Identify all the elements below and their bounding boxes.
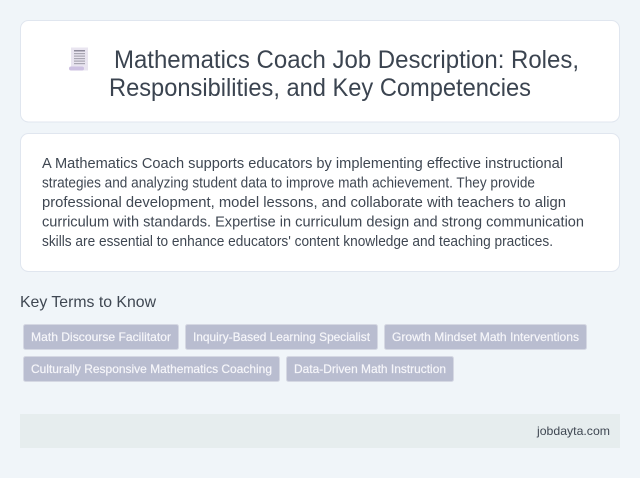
tag: data-driven <box>286 356 454 382</box>
footer source: jobdayta.com <box>536 424 610 438</box>
tag list <box>24 324 586 382</box>
description text <box>42 156 584 250</box>
heading: key terms: Key Terms to Know <box>20 294 156 311</box>
description text: professional development, model lessons, and collaborate with teachers to align <box>42 195 566 211</box>
heading <box>109 46 579 102</box>
tag: growth mindset: Growth Mindset Math Interventions <box>392 330 579 344</box>
tag: growth mindset <box>384 324 586 350</box>
tag: math discourse: Math Discourse Facilitator <box>31 330 171 344</box>
panel: title header <box>20 20 620 122</box>
icon: document scroll <box>69 48 88 70</box>
description text: curriculum with standards. Expertise in curriculum design and strong communication <box>42 214 584 230</box>
tag: math discourse <box>24 324 178 350</box>
description text: skills are essential to enhance educators' content knowledge and teaching practices. <box>42 234 553 250</box>
tag: culturally responsive: Culturally Responsive Mathematics Coaching <box>31 362 272 376</box>
description text: strategies and analyzing student data to improve math achievement. They provide <box>42 176 535 192</box>
heading: Mathematics Coach Job Description: Roles, <box>114 46 579 74</box>
tag: data-driven: Data-Driven Math Instruction <box>294 362 446 376</box>
heading: Responsibilities, and Key Competencies <box>109 74 531 102</box>
panel: description <box>20 134 620 272</box>
description text: A Mathematics Coach supports educators by implementing effective instructional <box>42 156 563 172</box>
tag: culturally responsive <box>24 356 280 382</box>
footer bar <box>20 414 620 448</box>
tag: inquiry-based <box>186 324 378 350</box>
tag: inquiry-based: Inquiry-Based Learning Specialist <box>193 330 371 344</box>
